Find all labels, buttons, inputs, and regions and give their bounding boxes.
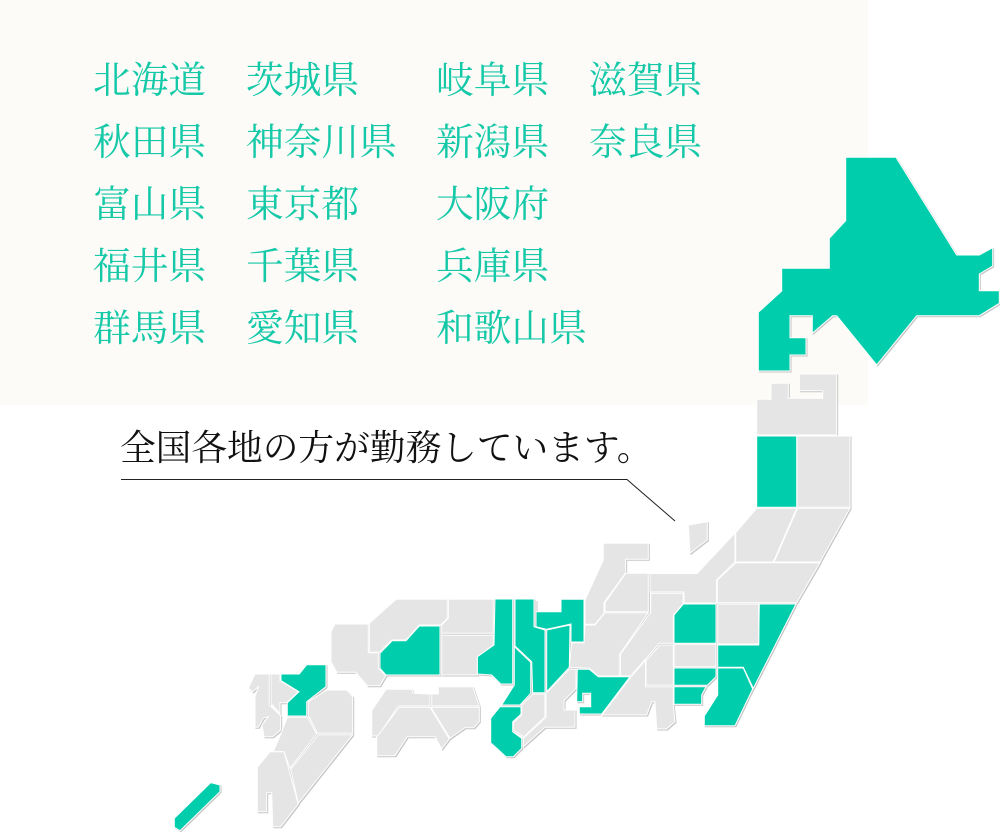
- region: Chugoku: [331, 599, 493, 686]
- prefecture: Aichi: 愛知県: [246, 308, 359, 350]
- heading: 全国各地の方が勤務しています。: [120, 428, 652, 468]
- prefecture: Fukui: 福井県: [93, 246, 206, 288]
- prefecture: Tokyo: 東京都: [246, 184, 359, 226]
- prefecture: Gunma: 群馬県: [93, 308, 206, 350]
- prefecture: Akita: 秋田県: [93, 122, 206, 164]
- region: Kyushu: [248, 665, 353, 827]
- prefecture: Nara: 奈良県: [589, 122, 702, 164]
- island: Okinawa: [174, 783, 220, 831]
- prefecture list: [93, 60, 702, 350]
- region: Kanto: [674, 604, 796, 726]
- region: Chubu: [523, 533, 735, 747]
- island: Sado: [688, 522, 707, 553]
- prefecture: Kanagawa: 神奈川県: [246, 122, 397, 164]
- prefecture: Wakayama: 和歌山県: [436, 308, 587, 350]
- region: Kinki and Hokuriku: [477, 599, 584, 757]
- prefecture: Osaka: 大阪府: [436, 184, 549, 226]
- prefecture: Hyogo: 兵庫県: [436, 246, 549, 288]
- callout leader line: [121, 480, 675, 521]
- prefecture: Toyama: 富山県: [93, 184, 206, 226]
- prefecture: Niigata: 新潟県: [436, 122, 549, 164]
- region: Tohoku: [717, 374, 850, 603]
- panel: prefecture list background: [0, 0, 868, 405]
- prefecture: Hokkaido: 北海道: [93, 60, 206, 102]
- prefecture: Gifu: 岐阜県: [436, 60, 549, 102]
- prefecture: Ibaraki: 茨城県: [246, 60, 359, 102]
- region: Shikoku: [372, 687, 479, 756]
- region: Hokkaido: [758, 157, 999, 371]
- prefecture: Shiga: 滋賀県: [589, 60, 702, 102]
- prefecture: Chiba: 千葉県: [246, 246, 359, 288]
